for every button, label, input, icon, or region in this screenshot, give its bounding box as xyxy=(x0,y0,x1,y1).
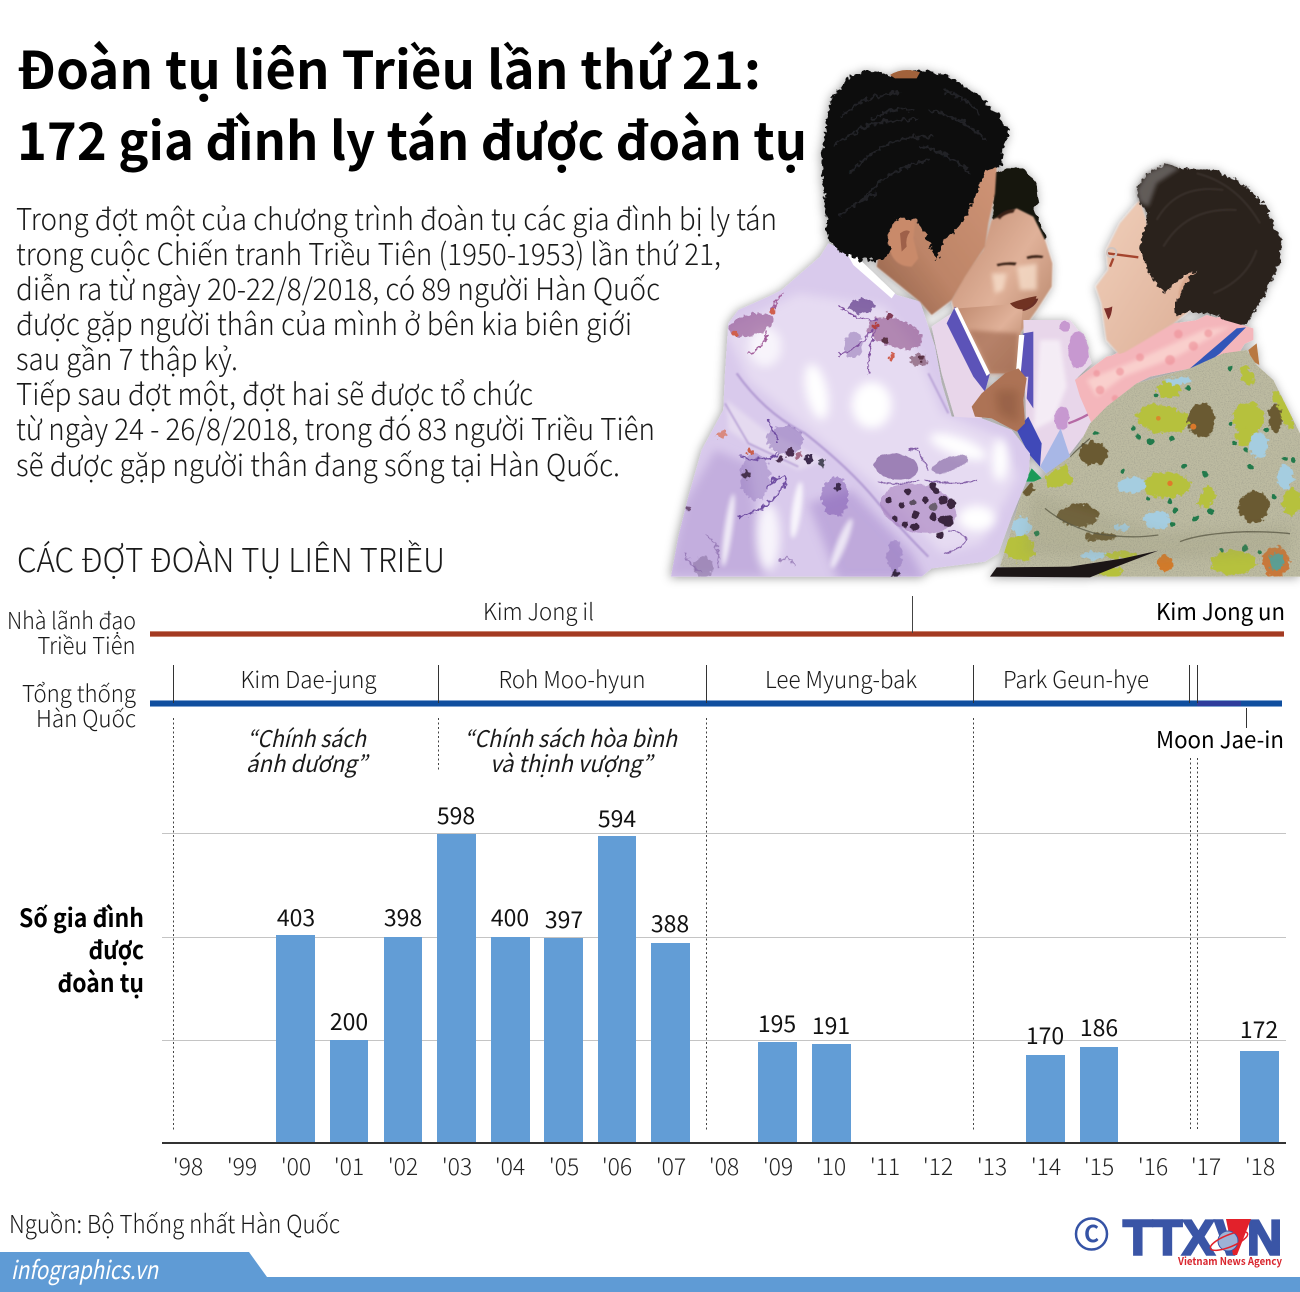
dark gap at bottom xyxy=(990,551,1158,577)
year axis labels xyxy=(173,1148,1275,1182)
label: South Korean presidents: Tổng thống xyxy=(22,675,136,709)
intro paragraph: trong cuộc Chiến tranh Triều Tiên (1950-1953) lần thứ 21, xyxy=(16,230,721,274)
name: Roh Moo-hyun: Roh Moo-hyun xyxy=(498,661,646,695)
name: Lee Myung-bak: Lee Myung-bak xyxy=(765,661,917,695)
name: Kim Jong un: Kim Jong un xyxy=(1156,593,1285,627)
year axis labels: '02 xyxy=(388,1148,418,1182)
year axis labels: '09 xyxy=(763,1148,793,1182)
agency name: Vietnam News Agency xyxy=(1177,1254,1282,1269)
footer band xyxy=(0,1251,1300,1292)
chart axis title: đoàn tụ xyxy=(58,964,144,1000)
right woman hair xyxy=(1137,163,1282,327)
bar values: 594 xyxy=(598,800,636,834)
bar values: 191 xyxy=(812,1007,850,1041)
year axis labels: '15 xyxy=(1084,1148,1114,1182)
right woman scarf top xyxy=(1110,317,1253,357)
bar values: 398 xyxy=(384,899,422,933)
scarf xyxy=(1075,315,1253,423)
bar values: 388 xyxy=(651,905,689,939)
bars xyxy=(276,834,1279,1143)
left woman head xyxy=(822,70,1009,315)
policy: sunshine: “Chính sách xyxy=(247,720,367,754)
source: Nguồn: Bộ Thống nhất Hàn Quốc xyxy=(9,1205,340,1241)
label: North Korean leaders: Nhà lãnh đạo xyxy=(7,602,136,636)
year axis labels: '11 xyxy=(870,1148,900,1182)
year axis labels: '00 xyxy=(281,1148,311,1182)
label: North Korean leaders xyxy=(7,602,136,661)
year axis labels: '12 xyxy=(923,1148,953,1182)
policy: sunshine xyxy=(246,720,370,779)
centre woman and right woman head xyxy=(952,163,1282,362)
embroidery belt xyxy=(717,420,849,517)
bar values: 172 xyxy=(1240,1011,1278,1045)
year axis labels: '99 xyxy=(227,1148,257,1182)
year axis labels: '03 xyxy=(442,1148,472,1182)
year axis labels: '17 xyxy=(1191,1148,1221,1182)
right woman scarf and jacket xyxy=(990,315,1300,578)
name: Kim Dae-jung: Kim Dae-jung xyxy=(240,661,377,695)
timeline: South Korea xyxy=(150,661,1284,755)
chart axis title: Số gia đình xyxy=(19,899,144,935)
logo: TTXVN xyxy=(1076,1212,1282,1269)
year axis labels: '18 xyxy=(1245,1148,1275,1182)
bar values: 195 xyxy=(758,1005,796,1039)
policy: peace and prosperity: “Chính sách hòa bình xyxy=(464,720,678,754)
collar and hand of centre woman xyxy=(932,296,1042,467)
embroidery left shoulder xyxy=(726,293,782,355)
jacket flowers xyxy=(1004,363,1300,578)
title: 172 gia đình ly tán được đoàn tụ xyxy=(17,100,807,175)
title: Đoàn tụ liên Triều lần thứ 21: xyxy=(17,29,761,104)
label: South Korean presidents: Hàn Quốc xyxy=(36,700,136,734)
intro paragraph xyxy=(16,195,777,485)
year axis labels: '01 xyxy=(334,1148,364,1182)
icon: copyright xyxy=(1076,1215,1107,1250)
timeline: North Korea xyxy=(150,593,1285,637)
bar values: 186 xyxy=(1080,1009,1118,1043)
icon: copyright: C xyxy=(1084,1215,1099,1249)
name: Park Geun-hye: Park Geun-hye xyxy=(1003,661,1149,695)
centre woman dress xyxy=(1023,320,1093,467)
centre woman hair xyxy=(993,168,1047,242)
right woman face xyxy=(1096,200,1197,355)
label: North Korean leaders: Triều Tiên xyxy=(38,627,136,661)
year axis labels: '06 xyxy=(602,1148,632,1182)
section heading: CÁC ĐỢT ĐOÀN TỤ LIÊN TRIỀU xyxy=(17,534,445,582)
intro paragraph: từ ngày 24 - 26/8/2018, trong đó 83 người Triều Tiên xyxy=(16,405,655,449)
left woman dress xyxy=(668,243,1042,580)
jacket xyxy=(1000,350,1300,577)
bar values: 598 xyxy=(437,797,475,831)
bar chart: families reunited xyxy=(162,718,1286,1182)
year axis labels: '13 xyxy=(977,1148,1007,1182)
intro paragraph: được gặp người thân của mình ở bên kia biên giới xyxy=(16,300,632,344)
jacket folds xyxy=(1045,438,1290,542)
centre woman face xyxy=(952,208,1052,362)
bar values: 397 xyxy=(545,901,583,935)
photo: three women embracing xyxy=(668,70,1300,580)
year axis labels: '04 xyxy=(495,1148,525,1182)
left woman ear xyxy=(888,218,918,267)
intro paragraph: diễn ra từ ngày 20-22/8/2018, có 89 người Hàn Quốc xyxy=(16,265,660,309)
bar values: 200 xyxy=(330,1003,368,1037)
left woman face xyxy=(877,160,997,315)
year axis labels: '08 xyxy=(709,1148,739,1182)
name: Kim Jong il: Kim Jong il xyxy=(483,593,594,627)
policy: peace and prosperity: và thịnh vượng” xyxy=(490,745,655,779)
policy: sunshine: ánh dương” xyxy=(246,745,370,779)
left woman hair xyxy=(822,70,1009,260)
year axis labels: '14 xyxy=(1031,1148,1061,1182)
year axis labels: '07 xyxy=(656,1148,686,1182)
name: Moon Jae-in: Moon Jae-in xyxy=(1156,721,1284,755)
intro paragraph: sau gần 7 thập kỷ. xyxy=(16,335,238,379)
icon: red V and globe xyxy=(1208,1219,1251,1255)
year axis labels: '05 xyxy=(549,1148,579,1182)
intro paragraph: Tiếp sau đợt một, đợt hai sẽ được tổ chức xyxy=(16,370,533,414)
term dividers xyxy=(174,718,1198,1130)
bar values: 403 xyxy=(277,899,315,933)
year axis labels: '16 xyxy=(1138,1148,1168,1182)
label: South Korean presidents xyxy=(22,675,136,734)
embroidery skirt xyxy=(685,505,902,577)
chart grid xyxy=(162,833,1286,1041)
year axis labels: '10 xyxy=(816,1148,846,1182)
intro paragraph: sẽ được gặp người thân đang sống tại Hàn Quốc. xyxy=(16,441,620,485)
policy: peace and prosperity xyxy=(464,720,678,779)
title xyxy=(17,29,807,175)
grape embroidery xyxy=(871,448,978,553)
right woman glasses xyxy=(1107,248,1138,267)
dress shading xyxy=(668,293,1018,580)
bar values xyxy=(277,797,1278,1051)
intro paragraph: Trong đợt một của chương trình đoàn tụ các gia đình bị ly tán xyxy=(16,195,777,239)
bar values: 170 xyxy=(1026,1017,1064,1051)
chart axis title: được xyxy=(88,931,144,967)
bar values: 400 xyxy=(491,899,529,933)
chart axis title xyxy=(19,899,144,1000)
year axis labels: '98 xyxy=(173,1148,203,1182)
logo wordmark: TTXVN xyxy=(1123,1212,1282,1266)
embroidery top right xyxy=(838,299,927,373)
footer site name: infographics.vn xyxy=(11,1251,159,1287)
